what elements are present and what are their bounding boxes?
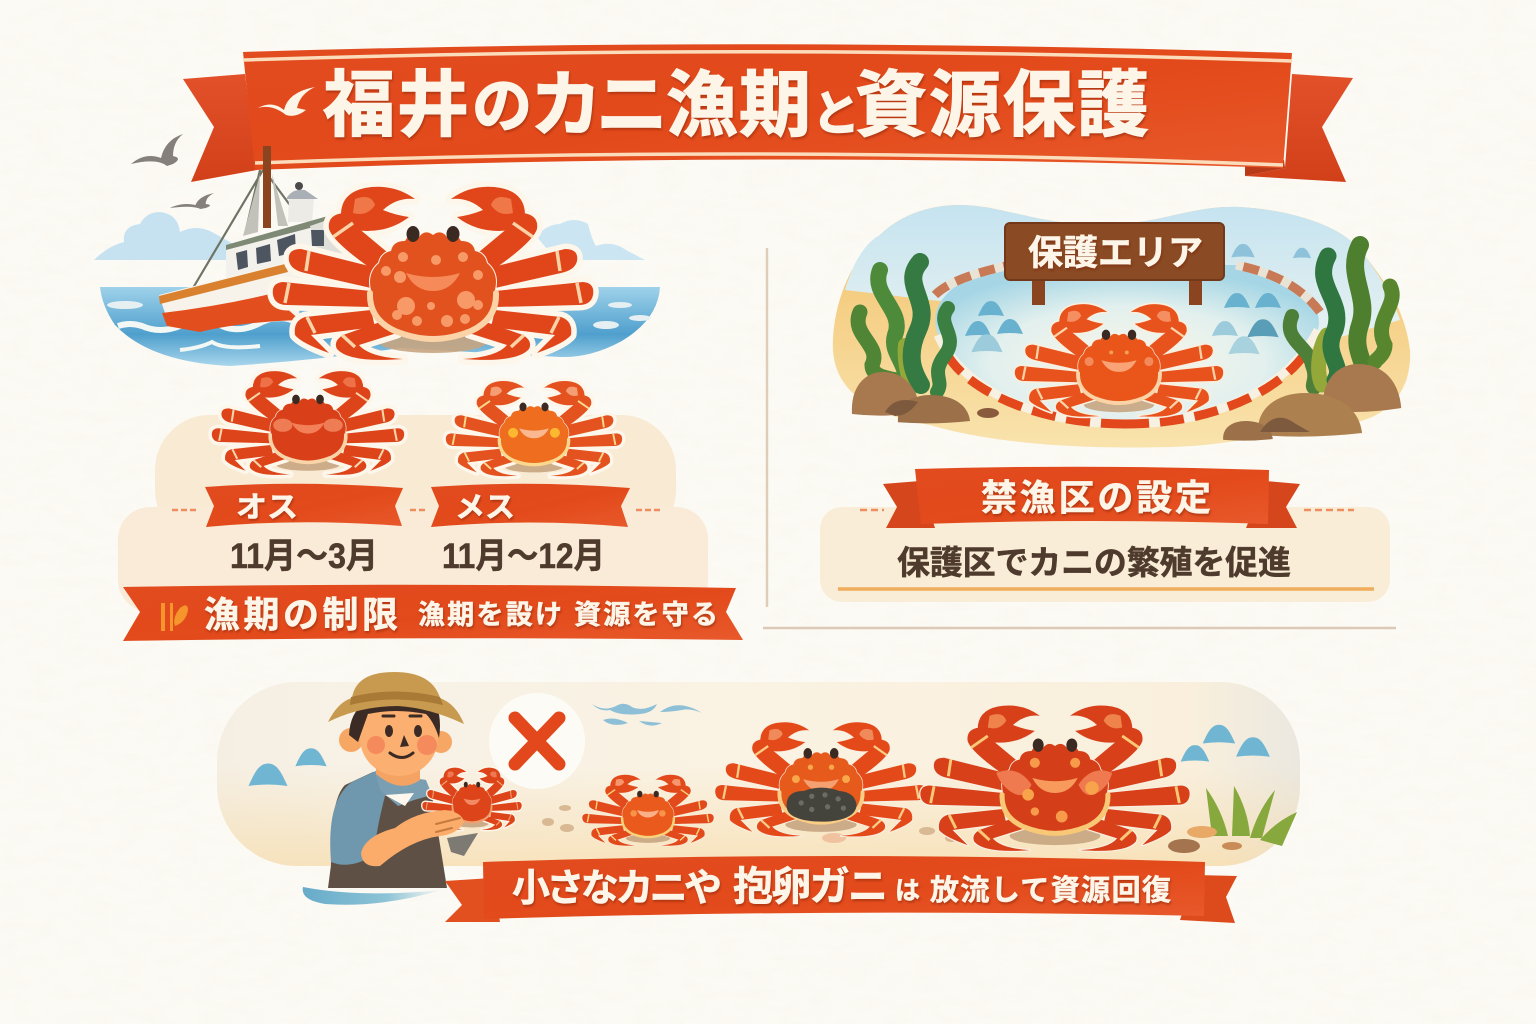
mast and rigging bbox=[193, 170, 298, 288]
release ribbon: 抱卵ガニ bbox=[733, 865, 888, 909]
protected crab bbox=[1015, 304, 1223, 417]
female ribbon: メス bbox=[455, 492, 515, 524]
ribbon: 禁漁区の設定 bbox=[981, 477, 1211, 518]
pebbles bbox=[542, 805, 957, 843]
release ribbon: 小さなカニや bbox=[512, 868, 722, 910]
neck bbox=[376, 760, 420, 786]
left mounds bbox=[248, 748, 327, 786]
water ripple bbox=[303, 887, 442, 905]
icon: limit bars bbox=[161, 603, 188, 631]
main red snow crab bbox=[273, 187, 593, 360]
wheelhouse bbox=[288, 198, 314, 222]
male crab bbox=[212, 371, 404, 475]
panel: no-fishing zone bbox=[820, 467, 1390, 602]
panel: season limits bbox=[118, 371, 743, 641]
held crab bbox=[422, 768, 522, 830]
egg-bearing crab bbox=[715, 722, 927, 836]
title text: 福井 bbox=[323, 66, 469, 146]
release ribbon: は bbox=[895, 877, 920, 905]
title gull icon bbox=[258, 87, 315, 116]
right mounds bbox=[1181, 725, 1270, 762]
seaweed left bbox=[858, 262, 950, 392]
ribbon tail left bbox=[183, 74, 257, 182]
pill backdrop bbox=[217, 682, 1300, 866]
male season dates: 11月〜3月 bbox=[230, 537, 378, 576]
sign board bbox=[1005, 223, 1224, 280]
season limit ribbon: 漁期の制限 bbox=[204, 594, 398, 635]
cream panel bbox=[820, 507, 1390, 602]
seaweed right bbox=[1290, 245, 1392, 388]
clouds bbox=[94, 212, 238, 260]
protected area scene bbox=[833, 205, 1410, 448]
sea bbox=[100, 287, 660, 366]
title text: 資源保護 bbox=[855, 66, 1149, 146]
pool and rope ring bbox=[935, 265, 1319, 424]
vertical divider bbox=[766, 248, 768, 607]
cream backing lower bbox=[118, 507, 708, 612]
sand ground bbox=[833, 205, 1410, 448]
torso bbox=[328, 772, 447, 888]
season limit ribbon: 漁期を設け 資源を守る bbox=[418, 600, 718, 630]
boat bbox=[159, 146, 350, 332]
cheeks bbox=[367, 736, 385, 754]
female ribbon bbox=[431, 484, 630, 527]
rock in hand bbox=[447, 833, 478, 856]
X circle bbox=[489, 693, 585, 789]
male ribbon: オス bbox=[236, 492, 298, 524]
sign posts bbox=[1032, 275, 1202, 305]
ribbon tail right bbox=[1245, 74, 1353, 182]
female crab bbox=[446, 381, 622, 476]
gulls in sky bbox=[131, 134, 214, 209]
eyes and smile bbox=[385, 725, 393, 737]
hull bbox=[159, 260, 300, 328]
title ribbon bbox=[183, 44, 1353, 182]
female season dates: 11月〜12月 bbox=[442, 537, 605, 576]
hat bbox=[328, 672, 464, 724]
ribbon bbox=[883, 467, 1300, 528]
rocks bbox=[852, 364, 1401, 441]
title text: カニ漁期 bbox=[530, 66, 811, 146]
male ribbon bbox=[205, 484, 403, 527]
large crab bbox=[920, 706, 1190, 851]
egg mass bbox=[787, 788, 857, 822]
fisherman bbox=[303, 672, 522, 905]
water mounds bbox=[965, 244, 1311, 354]
sign board: 保護エリア bbox=[1028, 234, 1203, 273]
small crab bbox=[582, 775, 714, 846]
release ribbon: 放流して資源回復 bbox=[930, 874, 1171, 907]
title text: の bbox=[472, 73, 532, 140]
grass and sand bbox=[1168, 786, 1297, 853]
season limit ribbon bbox=[123, 585, 743, 641]
description: 保護区でカニの繁殖を促進 bbox=[897, 544, 1291, 581]
arm and hand bbox=[361, 810, 464, 866]
ears bbox=[339, 728, 363, 752]
sky water bbox=[845, 205, 1400, 340]
cream backing upper bbox=[155, 415, 676, 545]
wave marks bbox=[592, 704, 702, 726]
shirt bbox=[330, 770, 386, 865]
release ribbon bbox=[445, 856, 1237, 923]
face bbox=[360, 700, 438, 776]
panel: release small crabs bbox=[217, 672, 1300, 923]
fishing scene bbox=[94, 146, 660, 366]
ribbon body bbox=[243, 44, 1292, 170]
title text: と bbox=[812, 88, 860, 141]
